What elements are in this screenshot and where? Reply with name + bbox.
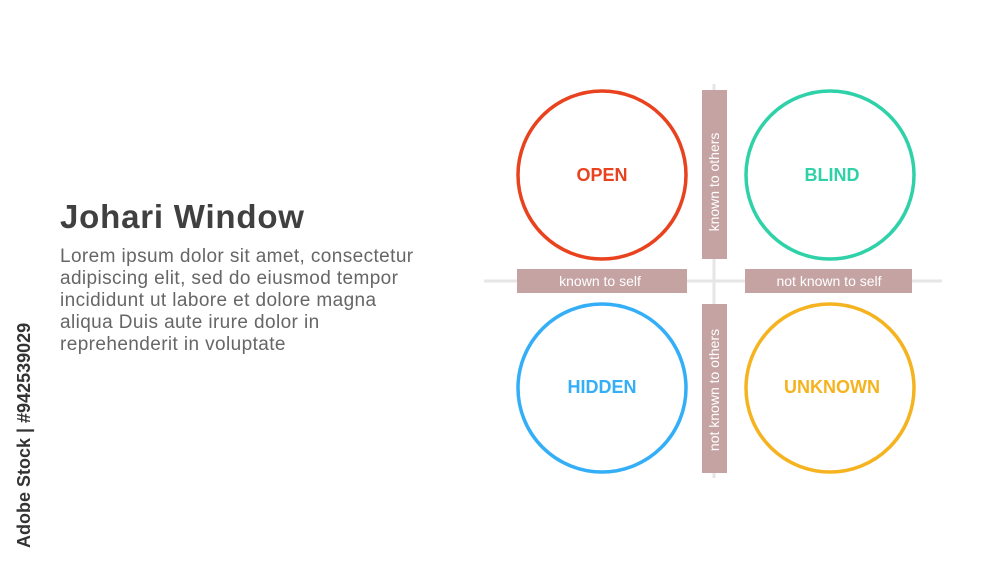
title: Johari Window <box>60 198 305 235</box>
label: known to self: known to self <box>559 273 641 289</box>
label: known to others <box>702 90 727 259</box>
body text: adipiscing elit, sed do eiusmod tempor <box>60 268 398 289</box>
body text: incididunt ut labore et dolore magna <box>60 290 376 311</box>
circle: open: OPEN <box>576 165 628 185</box>
side credit text: Adobe Stock | #942539029 <box>14 323 34 548</box>
label: known to others: known to others <box>706 133 722 231</box>
label: not known to self <box>745 269 912 293</box>
label: known to self <box>517 269 687 293</box>
circle: hidden <box>518 304 686 472</box>
body text: Lorem ipsum dolor sit amet, consectetur <box>60 246 414 267</box>
body text <box>60 246 414 355</box>
body text: reprehenderit in voluptate <box>60 334 286 355</box>
circle: blind <box>746 91 914 259</box>
circle: open <box>518 91 686 259</box>
circle: hidden: HIDDEN <box>567 377 637 397</box>
circle: unknown: UNKNOWN <box>784 377 880 397</box>
body text: aliqua Duis aute irure dolor in <box>60 312 320 333</box>
label: not known to others: not known to others <box>706 329 722 451</box>
circle: unknown <box>746 304 914 472</box>
label: not known to others <box>702 304 727 473</box>
label: not known to self: not known to self <box>776 273 882 289</box>
circle: blind: BLIND <box>804 165 860 185</box>
